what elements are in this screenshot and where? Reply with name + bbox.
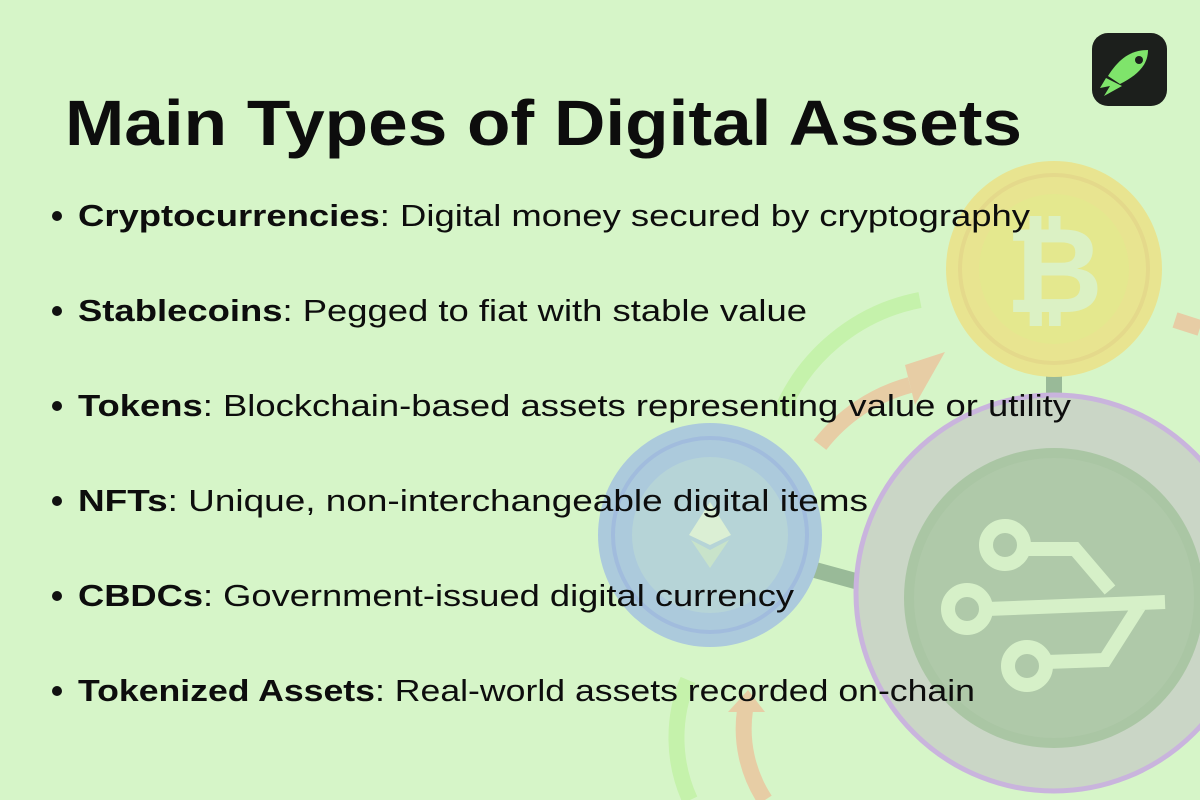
connectors [815, 370, 1062, 585]
arrow: bottom arcs [676, 680, 765, 800]
item: tokens: Tokens : Blockchain-based assets representing value or utility [78, 388, 1072, 423]
item: cryptocurrencies: Cryptocurrencies : Digital money secured by cryptography [78, 198, 1031, 233]
item: tokenized assets: Tokenized Assets : Real-world assets recorded on-chain [78, 673, 975, 708]
icon: ethereum coin [598, 423, 822, 647]
item: CBDCs: CBDCs : Government-issued digital currency [78, 578, 795, 613]
title: Main Types of Digital Assets [65, 87, 1022, 159]
illustration: coins network [598, 161, 1200, 800]
item: stablecoins: Stablecoins : Pegged to fiat with stable value [78, 293, 807, 328]
icon: bitcoin coin: ₿ [1005, 204, 1103, 338]
item: NFTs: NFTs : Unique, non-interchangeable digital items [78, 483, 868, 518]
icon: bitcoin coin [946, 161, 1162, 377]
icon: rocket logo [1092, 33, 1167, 106]
list: digital asset types [52, 198, 1072, 708]
icon: blockchain coin [854, 393, 1200, 793]
arrow: orange arc right [1175, 320, 1200, 328]
arrow: orange arc [820, 352, 945, 445]
arrow: green arc top [780, 300, 920, 415]
